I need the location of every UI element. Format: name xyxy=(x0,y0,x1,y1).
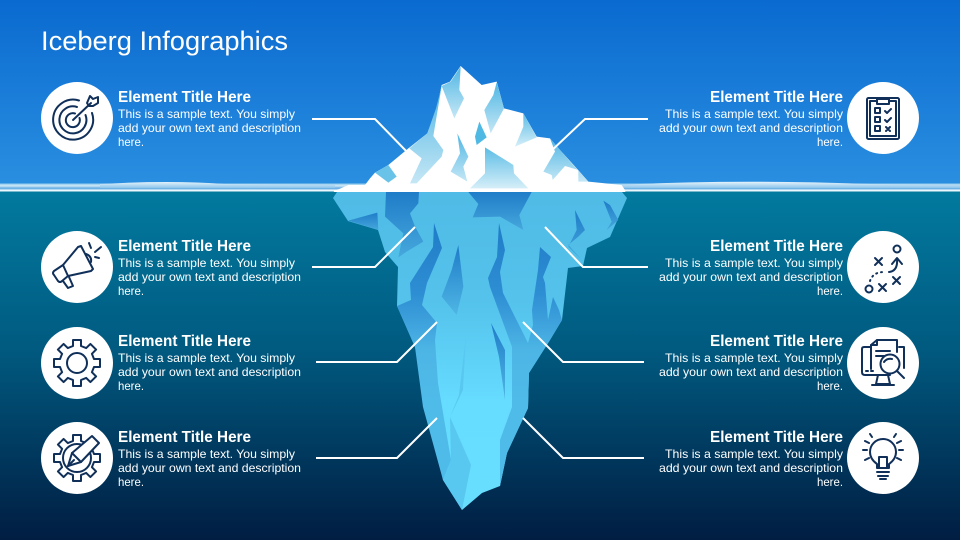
icon: monitor and magnifier xyxy=(862,340,904,385)
element 8: light bulb xyxy=(659,422,919,494)
icon: megaphone xyxy=(53,243,101,288)
element 3: gear: add your own text and description xyxy=(118,365,301,379)
centre facet xyxy=(443,335,471,510)
element 3: gear: here. xyxy=(118,379,144,393)
left stripe and lower band xyxy=(397,223,451,480)
element 1: target: here. xyxy=(118,135,144,149)
small dark shard xyxy=(491,323,505,400)
element 3: gear: Element Title Here xyxy=(118,333,251,350)
icon: gear pencil xyxy=(54,435,100,481)
iceberg above water xyxy=(333,66,626,192)
element 3: gear: This is a sample text. You simply xyxy=(118,351,295,365)
iceberg below water xyxy=(333,192,627,510)
element 3: gear xyxy=(41,327,301,399)
element 5: checklist: add your own text and description xyxy=(659,121,843,135)
element 2: megaphone: Element Title Here xyxy=(118,238,251,255)
sea background xyxy=(0,191,960,540)
element 4: gear with pencil: here. xyxy=(118,475,144,489)
icon: target xyxy=(53,96,98,140)
element 4: gear with pencil: add your own text and description xyxy=(118,461,301,475)
element 1: target: Element Title Here xyxy=(118,89,251,106)
element 1: target: This is a sample text. You simply xyxy=(118,107,295,121)
element 4: gear with pencil: Element Title Here xyxy=(118,429,251,446)
right stripes and lower band xyxy=(488,223,562,486)
element 6: strategy: here. xyxy=(817,284,843,298)
element 8: light bulb: Element Title Here xyxy=(710,429,843,446)
element 2: megaphone: add your own text and description xyxy=(118,270,301,284)
element 5: checklist: here. xyxy=(817,135,843,149)
element 1: target: add your own text and description xyxy=(118,121,301,135)
element 6: strategy: This is a sample text. You simply xyxy=(665,256,843,270)
element 5: checklist: This is a sample text. You simply xyxy=(665,107,843,121)
element 8: light bulb: add your own text and description xyxy=(659,461,843,475)
element 1: target xyxy=(41,82,301,154)
element 4: gear with pencil xyxy=(41,422,301,494)
element 6: strategy: Element Title Here xyxy=(710,238,843,255)
element 4: gear with pencil: This is a sample text. You simply xyxy=(118,447,295,461)
element 7: document search: here. xyxy=(817,379,843,393)
element 8: light bulb: here. xyxy=(817,475,843,489)
element 5: checklist xyxy=(659,82,919,154)
element 7: document search: This is a sample text. You simply xyxy=(665,351,843,365)
element 2: megaphone: This is a sample text. You simply xyxy=(118,256,295,270)
element 6: strategy: add your own text and description xyxy=(659,270,843,284)
icon: clipboard xyxy=(867,98,899,139)
element 7: document search: Element Title Here xyxy=(710,333,843,350)
element 5: checklist: Element Title Here xyxy=(710,89,843,106)
waterline xyxy=(334,190,625,192)
element 6: strategy xyxy=(659,231,919,303)
main title: Iceberg Infographics xyxy=(41,26,288,56)
element 2: megaphone: here. xyxy=(118,284,144,298)
icon: strategy play xyxy=(866,246,902,292)
icon: gear xyxy=(54,340,100,386)
element 8: light bulb: This is a sample text. You simply xyxy=(665,447,843,461)
element 7: document search: add your own text and description xyxy=(659,365,843,379)
sky background xyxy=(0,0,960,186)
icon: light bulb xyxy=(863,434,903,479)
element 7: document search xyxy=(659,327,919,399)
element 2: megaphone xyxy=(41,231,301,303)
connector lines xyxy=(312,119,648,458)
horizon band xyxy=(0,182,960,192)
